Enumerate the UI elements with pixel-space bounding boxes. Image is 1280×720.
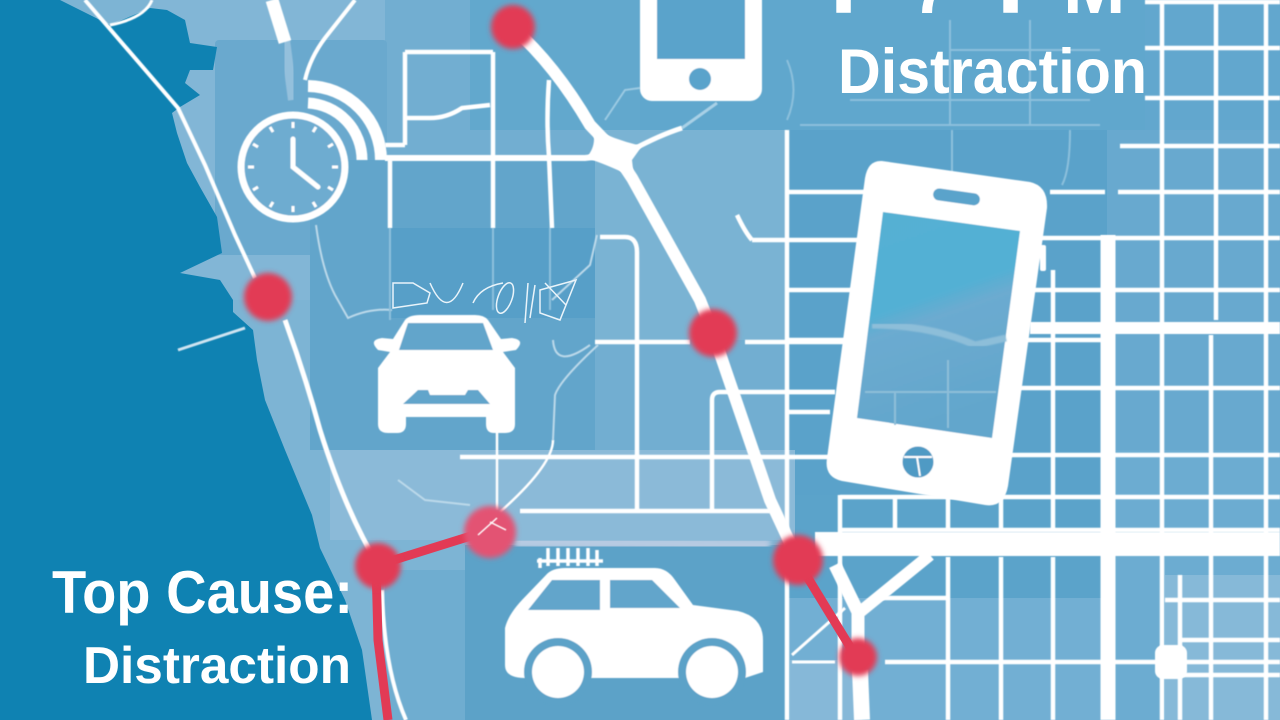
land road faded: [285, 40, 293, 100]
icon: large phone: [827, 161, 1047, 505]
scribbled lines above car: [393, 280, 576, 323]
faded road to marker: [515, 542, 770, 545]
icon: front-view car: [374, 315, 520, 433]
icon: side-view car: [505, 548, 763, 706]
heading: clipped top text: [813, 0, 1125, 35]
faint secondary streets: [178, 20, 1100, 505]
heading: Top Cause: Top Cause:: [52, 559, 353, 626]
icon: clock with signal arcs: [241, 86, 381, 219]
heading: Distraction top right: Distraction: [838, 37, 1147, 107]
main roads: [272, 0, 1280, 720]
red route lines: [376, 530, 858, 720]
icon: top phone: [640, 0, 762, 101]
accident markers: [244, 5, 877, 676]
grey pale road: [1102, 130, 1118, 235]
subheading: Distraction bottom left: Distraction: [83, 637, 351, 695]
road junction: [586, 128, 642, 178]
small road strands over marker: [478, 518, 506, 535]
water: [0, 0, 372, 720]
junction: lower right: [1155, 645, 1187, 679]
